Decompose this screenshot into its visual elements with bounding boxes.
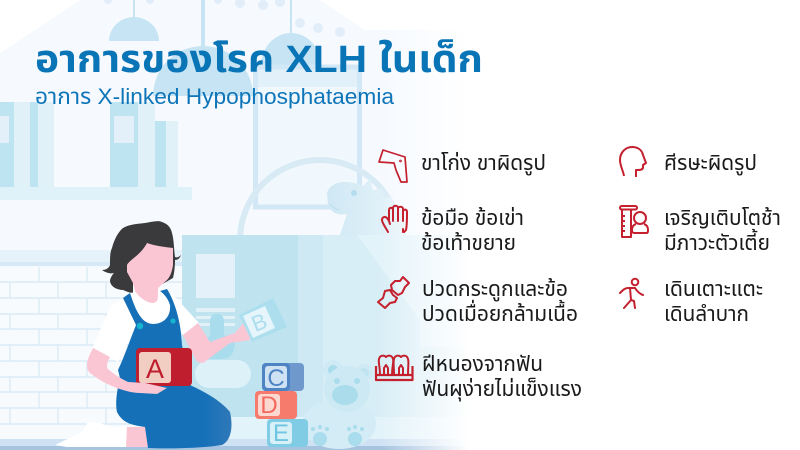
label: tooth abscess: ฝีหนองจากฟัน: [422, 353, 543, 376]
icon: head: [620, 147, 646, 177]
symptom: difficulty walking: [620, 278, 763, 326]
icon: hand: [382, 206, 407, 232]
label: skull deformity: ศีรษะผิดรูป: [664, 152, 757, 176]
label: slow growth: [664, 206, 781, 255]
overalls: [116, 289, 231, 448]
block C: C: [267, 365, 285, 392]
block B: [239, 298, 287, 342]
label: swollen joints: ข้อมือ ข้อเข่า: [421, 206, 524, 230]
label: difficulty walking: เดินลำบาก: [664, 303, 749, 326]
block C: [262, 363, 304, 392]
label: bone and muscle pain: ปวดเมื่อยกล้ามเนื้อ: [422, 299, 578, 326]
overall buttons: [137, 323, 143, 329]
label: tooth abscess: [422, 353, 582, 402]
white area right of the fade: [470, 0, 800, 450]
icon: walking person: [620, 279, 643, 308]
block A: [136, 348, 192, 386]
block E: [267, 419, 308, 447]
symptom: tooth abscess: [376, 353, 582, 402]
icon: ruler and child: [620, 206, 648, 237]
icon: teeth: [376, 356, 412, 380]
block D: [255, 391, 297, 419]
label: difficulty walking: เดินเตาะแตะ: [664, 278, 763, 301]
block E: E: [273, 420, 289, 447]
label: swollen joints: [421, 206, 524, 255]
icon: leg: [379, 150, 407, 182]
block D: D: [260, 392, 278, 419]
teddy bear: [302, 360, 376, 449]
label: bone and muscle pain: ปวดกระดูกและข้อ: [422, 277, 568, 302]
sock: [55, 422, 127, 447]
shirt: [93, 289, 199, 362]
symptom: bone and muscle pain: [378, 277, 578, 326]
subtitle: อาการ X-linked Hypophosphataemia: [35, 84, 395, 109]
label: difficulty walking: [664, 278, 763, 326]
label: slow growth: เจริญเติบโตช้า: [664, 206, 781, 230]
soft white fade over the illustration: [380, 0, 470, 450]
label: slow growth: มีภาวะตัวเตี้ย: [664, 228, 770, 255]
label: bowed legs: ขาโก่ง ขาผิดรูป: [421, 151, 546, 176]
symptom: swollen joints: [382, 206, 524, 255]
far leg: [125, 427, 149, 447]
symptom: bowed legs: [379, 150, 546, 182]
left arm holding block: [87, 348, 167, 394]
girl figure: [55, 221, 250, 448]
neck and face: [127, 243, 173, 303]
label: tooth abscess: ฟันผุง่ายไม่แข็งแรง: [422, 376, 582, 402]
label: bone and muscle pain: [422, 277, 578, 326]
symptom: skull deformity: [620, 147, 757, 177]
block A: A: [146, 354, 164, 384]
right arm reaching to block: [183, 319, 250, 363]
symptom: slow growth: [620, 206, 781, 255]
icon: joint: [378, 277, 409, 308]
block B: B: [248, 308, 271, 337]
title: อาการของโรค XLH ในเด็ก: [35, 39, 483, 81]
label: swollen joints: ข้อเท้าขยาย: [421, 231, 516, 255]
hair: [102, 221, 181, 293]
